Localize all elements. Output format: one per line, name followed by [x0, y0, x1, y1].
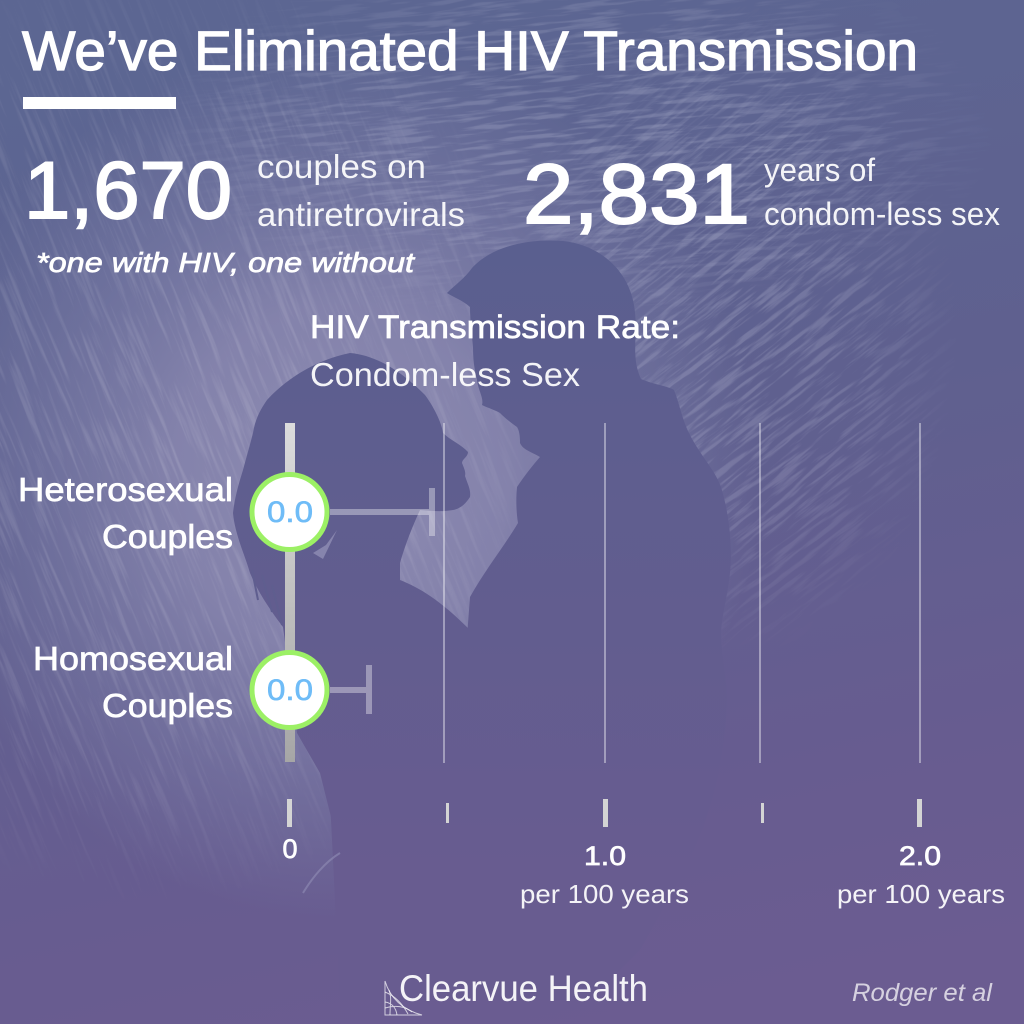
number: 2,831: 2,831: [523, 147, 750, 241]
error bar: homosexual: [330, 665, 372, 714]
light hem line: [303, 853, 340, 893]
light wisp in hair: [313, 530, 337, 559]
row label: heterosexual couples: Couples: [102, 518, 233, 555]
years description: condom-less sex: [764, 196, 1000, 232]
years description: [764, 152, 1000, 232]
chart heading: [310, 309, 680, 393]
wordmark: Clearvue Health: [399, 968, 648, 1009]
axis ticks: [287, 799, 922, 827]
value marker: homosexual: 0.0: [267, 674, 313, 707]
row label: heterosexual couples: [18, 471, 233, 555]
row label: heterosexual couples: Heterosexual: [18, 471, 233, 508]
axis label: 1.0: [520, 841, 689, 909]
grid lines: [443, 423, 921, 763]
stat: couples: [24, 146, 465, 278]
silhouette: couple: [233, 240, 731, 1000]
value marker: heterosexual: [252, 474, 327, 550]
logo: Clearvue Health: [385, 968, 648, 1015]
stat: years: [523, 147, 1000, 241]
years description: years of: [764, 152, 875, 188]
axis label: 2.0: per 100 years: [837, 879, 1005, 909]
axis label: 2.0: 2.0: [899, 841, 941, 871]
row label: homosexual couples: [33, 640, 233, 724]
icon: web triangle: [385, 981, 422, 1015]
chart heading: HIV Transmission Rate:: [310, 309, 680, 345]
chart: transmission rate: [18, 423, 1005, 909]
axis label: 1.0: per 100 years: [520, 879, 689, 909]
axis label: 2.0: [837, 841, 1005, 909]
footnote: *one with HIV, one without: [36, 247, 415, 278]
error bar: heterosexual: [330, 488, 435, 536]
axis label: 0: 0: [282, 834, 298, 864]
number: 1,670: 1,670: [24, 146, 232, 236]
title: We’ve Eliminated HIV Transmission: [22, 19, 918, 82]
source credit: Rodger et al: [852, 979, 993, 1007]
silhouette: woman: [233, 353, 505, 853]
title underline: [23, 97, 176, 109]
couples description: [257, 148, 465, 233]
row label: homosexual couples: Homosexual: [33, 640, 233, 677]
silhouette: man: [330, 240, 731, 1000]
couples description: couples on: [257, 148, 426, 185]
zero axis bar: [285, 423, 295, 762]
couples description: antiretrovirals: [257, 196, 465, 233]
axis label: 1.0: 1.0: [584, 841, 626, 871]
row label: homosexual couples: Couples: [102, 687, 233, 724]
value marker: heterosexual: 0.0: [267, 496, 313, 529]
chart heading: Condom-less Sex: [310, 356, 581, 393]
value marker: homosexual: [252, 652, 327, 728]
hair strands: [252, 570, 282, 625]
